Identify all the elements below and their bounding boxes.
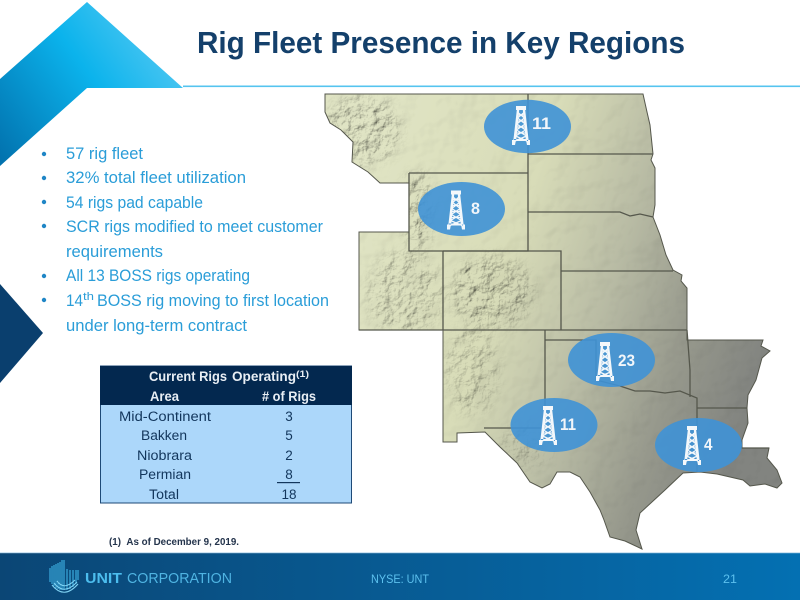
table rows: Mid-Continent [119,409,211,424]
footer bar: CORPORATION [127,570,232,587]
bullet list: th [83,291,94,303]
table rows: Total [149,487,179,502]
table rows [119,409,300,502]
state borders [359,94,769,472]
table: current rigs operating: Current Rigs [149,369,227,384]
bullet list: BOSS rig moving to first location [97,291,329,310]
table body [100,366,352,503]
table: current rigs operating: # of Rigs [262,389,316,404]
bullet list: 57 rig fleet [66,144,143,163]
marker: 11 rigs Bakken [484,100,571,153]
table rows: 3 [285,409,293,424]
table: current rigs operating: Area [150,389,179,404]
bullet list: 32% total fleet utilization [66,168,246,187]
marker: 4 rigs East Texas [655,418,742,472]
terrain with relief shading [320,90,790,560]
table rows: Bakken [141,428,187,443]
marker: 23 rigs Mid-Continent: 23 [618,351,635,370]
bullet list: All 13 BOSS rigs operating [66,266,250,285]
marker: 11 rigs Permian: 11 [560,415,576,434]
marker: 23 rigs Mid-Continent [568,333,655,387]
marker: 11 rigs Permian [510,398,598,452]
footnote: (1) As of December 9, 2019. [109,537,239,548]
table: current rigs operating: (1) [296,369,309,380]
marker: 4 rigs East Texas: 4 [704,435,713,454]
table rows: 2 [285,448,293,463]
marker: 8 rigs Niobrara: 8 [471,199,480,218]
page number: 21 [723,572,737,586]
map outline [325,94,782,549]
table: current rigs operating [100,366,352,503]
bullet list [42,144,329,335]
title: Rig Fleet Presence in Key Regions [197,25,685,60]
top-left chevron decoration [0,2,183,166]
logo wordmark: UNIT [85,570,122,587]
bullet list: 54 rigs pad capable [66,193,203,212]
bullet list: 14 [66,291,83,310]
bullet list: requirements [66,242,163,261]
marker: 11 rigs Bakken: 11 [532,114,551,133]
table rows: Niobrara [137,448,193,463]
table: current rigs operating: Operating [232,369,296,384]
left chevron decoration [0,284,43,383]
marker: 8 rigs Niobrara [418,182,505,236]
bullet list: SCR rigs modified to meet customer [66,217,323,236]
map of key regions [320,90,790,560]
table rows: Permian [139,467,191,482]
title rule [183,86,800,87]
ticker: NYSE: UNT [371,572,430,586]
table rows: 8 [285,467,293,482]
table rows: 18 [281,487,297,502]
table rows: 5 [285,428,293,443]
bullet list: under long-term contract [66,316,247,335]
footer bar [0,552,800,600]
logo mark [50,560,78,592]
table header [100,366,352,405]
